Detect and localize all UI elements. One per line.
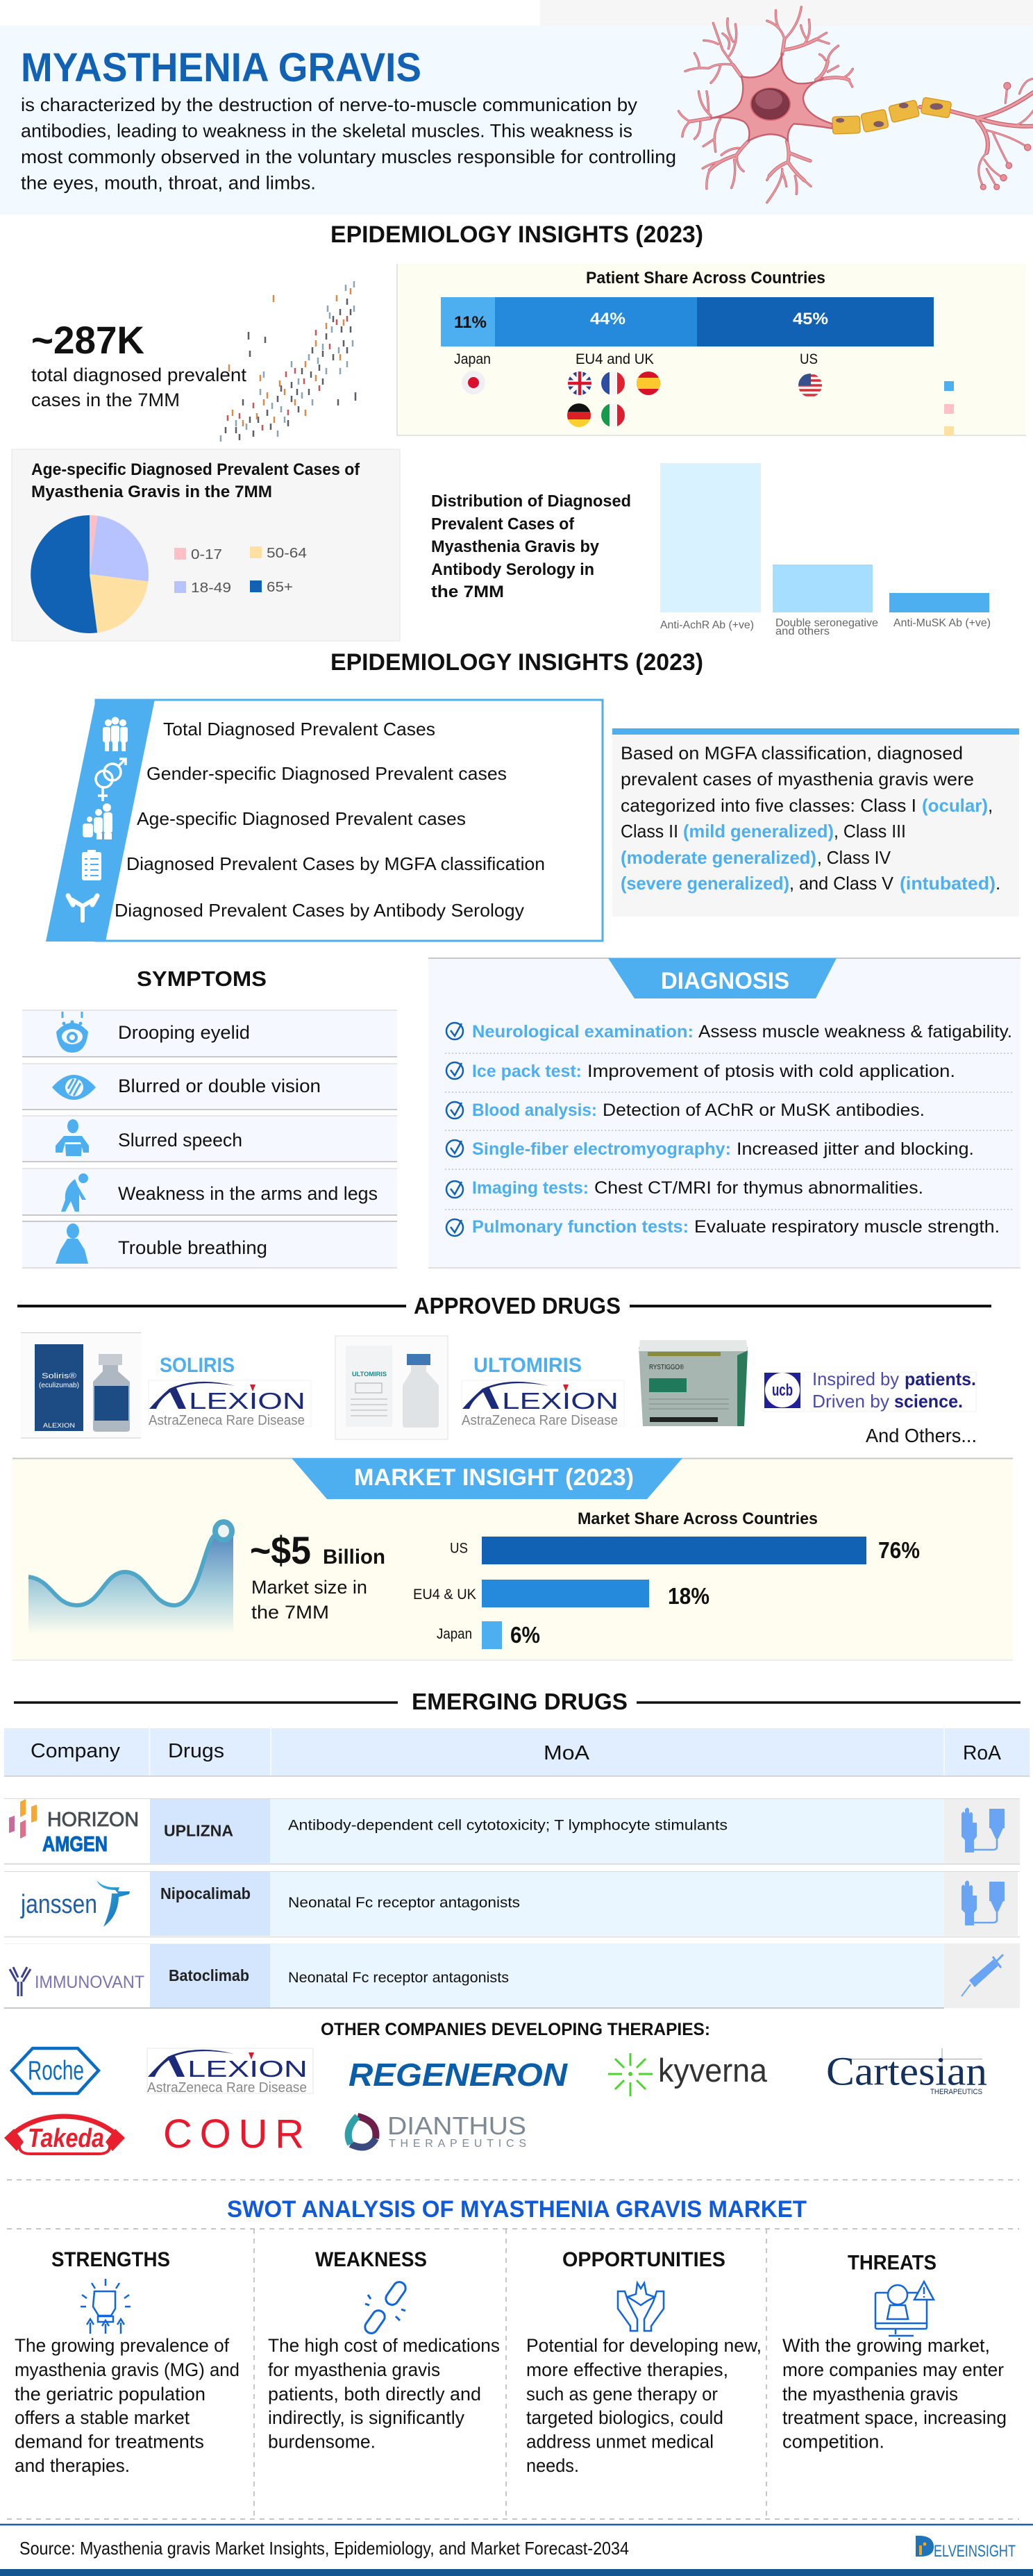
logo: Horizon and Amgen: HORIZON [47,1809,139,1831]
bar chart: market share: Market Share Across Countries [578,1509,818,1528]
country labels: US [800,351,818,367]
logo: Alexion [147,2048,313,2096]
bar chart: antibody serology: Anti-MuSK Ab (+ve) [893,617,991,629]
pie legend: 0-17 [191,547,222,562]
icon: flag of Spain [637,371,660,395]
heading: SWOT analysis: SWOT ANALYSIS OF MYASTHENIA GRAVIS MARKET [227,2196,807,2223]
logo: Dianthus: DIANTHUS [387,2111,526,2140]
check icons [446,1023,463,1236]
stacked bar chart: 11% [454,313,487,332]
icon: clipboard checklist [82,850,101,880]
panel: weakness: indirectly, is significantly [268,2407,464,2428]
symptom row: slurred speech: Slurred speech [118,1130,242,1151]
pie legend: 65+ [267,580,293,595]
table row: Uplizna: UPLIZNA [164,1822,233,1840]
stacked bar chart: 44% [590,310,625,328]
bar chart: market share: 18% [668,1583,709,1609]
logo: Roche [12,2048,99,2093]
drug image: Ultomiris pack [335,1336,448,1439]
table header: MoA [544,1742,590,1764]
symptom row: blurred vision [22,1063,397,1110]
diagnosis item 6: Pulmonary function tests: [472,1217,689,1237]
panel: MGFA classification note: Class II [621,821,678,842]
icon: weak person [61,1173,88,1212]
panel: MGFA classification note: (moderate generalized) [621,847,816,868]
drug name: Soliris: SOLIRIS [160,1354,235,1377]
icon: flag of Japan [462,371,485,394]
panel: weakness: WEAKNESS [315,2248,427,2271]
panel: strengths: The growing prevalence of [15,2335,229,2356]
section frame: SWOT dashed lines [7,2180,1019,2519]
stat: total prevalent cases: ~287K [31,318,144,362]
panel: strengths: the geriatric population [15,2384,205,2404]
logo: Cartesian: Cartesian [826,2048,987,2094]
panel: market insight [12,1458,1013,1660]
diagnosis item 6 [472,1217,1000,1237]
list item 3: Age-specific Diagnosed Prevalent cases [137,808,466,829]
table row: Nipocalimab: Neonatal Fc receptor antagonists [288,1895,520,1911]
stat: market size: Market size in [251,1577,367,1598]
panel: age-specific pie chart [12,449,400,641]
icon: intravenous route [961,1808,1005,1852]
text: and others: And Others... [866,1425,977,1446]
list item 5: Diagnosed Prevalent Cases by Antibody Serology [115,900,524,921]
panel: opportunities: needs. [526,2455,579,2476]
panel: MGFA classification note: Based on MGFA classification, diagnosed [621,743,963,764]
intro text block: most commonly observed in the voluntary muscles responsible for controlling [21,147,676,167]
panel: opportunities: address unmet medical [526,2432,714,2452]
source text: Source: Myasthenia gravis Market Insights, Epidemiology, and Market Forecast-2034 [19,2538,629,2559]
symptom row: weakness [22,1168,397,1215]
icon: raised fist [81,2279,131,2334]
stat: total prevalent cases: total diagnosed prevalent [31,365,246,385]
logo: Roche: Roche [28,2056,84,2086]
table row: Batoclimab: Neonatal Fc receptor antagonists [288,1970,509,1986]
banner: market insight: MARKET INSIGHT (2023) [354,1464,634,1491]
table header: RoA [963,1742,1002,1764]
diagnosis item 5 [472,1178,923,1198]
panel: MGFA classification note: prevalent cases of myasthenia gravis were [621,769,974,789]
intro text block [21,94,676,193]
pie legend: 18-49 [191,580,231,596]
diagnosis item 2 [472,1062,955,1081]
drug image: Ultomiris pack: ULTOMIRIS [352,1371,387,1378]
diagnosis item 1 [472,1022,1012,1042]
logo: UCB: Driven by [812,1391,889,1412]
stat: market size: ~$5 [250,1528,311,1572]
panel: threats: THREATS [848,2251,937,2275]
diagnosis item 2: Improvement of ptosis with cold application. [587,1062,955,1081]
logo: Cour: COUR [163,2111,304,2157]
panel: strengths: demand for treatments [15,2432,204,2452]
stat: market size: Billion [323,1546,385,1569]
diagnosis item 6: Evaluate respiratory muscle strength. [694,1217,1000,1237]
logo: UCB [764,1369,976,1412]
panel: weakness: burdensome. [268,2432,376,2452]
diagnosis item 1: Assess muscle weakness & fatigability. [698,1022,1012,1042]
logo: Alexion: AstraZeneca Rare Disease [147,2080,307,2096]
panel: opportunities: Potential for developing new, [526,2335,762,2356]
icon: neuron illustration [679,7,1033,203]
panel: threats: treatment space, increasing [782,2407,1007,2428]
drug image: Soliris pack [21,1332,141,1438]
area chart: market growth [28,1519,235,1634]
list item 4: Diagnosed Prevalent Cases by MGFA classification [126,853,545,874]
diagnosis item 1: Neurological examination: [472,1022,694,1042]
panel: MGFA classification note: , and Class V [789,873,894,894]
list item 2: Gender-specific Diagnosed Prevalent cases [146,763,507,784]
icon: family age groups [83,803,112,839]
bar chart: market share: 76% [878,1537,920,1563]
banner: diagnosis [608,958,837,998]
table row: Batoclimab: Batoclimab [169,1966,249,1984]
text block: antibody serology title [431,492,631,601]
logo: Alexion: LEXION [502,1388,619,1414]
logo: Takeda [4,2116,125,2154]
logo: Dianthus: THERAPEUTICS [389,2138,526,2150]
pie legend [174,546,307,596]
heading: epidemiology insights: EPIDEMIOLOGY INSIGHTS (2023) [330,221,703,248]
panel: MGFA classification note [612,728,1019,917]
drug image: Rystiggo pack: RYSTIGGO® [649,1364,685,1371]
text block: antibody serology title: Distribution of Diagnosed [431,492,631,511]
text block: antibody serology title: the 7MM [431,583,504,601]
panel: MGFA classification note: , Class IV [817,847,891,868]
icon: flag of France [601,371,625,395]
logo: Horizon and Amgen: AMGEN [42,1832,108,1856]
list item 1: Total Diagnosed Prevalent Cases [163,719,435,739]
footer [0,2525,1033,2576]
table row: Uplizna [4,1798,1020,1864]
country labels: Japan [454,351,491,367]
logo: Immunovant [10,1967,144,1996]
intro text block: the eyes, mouth, throat, and limbs. [21,172,316,193]
symptom row: trouble breathing: Trouble breathing [118,1237,267,1258]
panel: strengths: myasthenia gravis (MG) and [15,2359,240,2380]
stat: market size: the 7MM [251,1602,329,1623]
panel: MGFA classification note: (intubated) [900,873,996,894]
table row: Batoclimab [4,1944,1020,2008]
logo: UCB: ucb [772,1381,793,1400]
stat: total prevalent cases: cases in the 7MM [31,390,180,410]
bar chart: market share: 6% [510,1622,540,1648]
bar chart: market share: US [450,1540,468,1557]
bar chart: antibody serology [660,463,991,637]
panel: MGFA classification note: , Class III [834,821,906,842]
banner: market insight [292,1458,682,1499]
heading: epidemiology insights second: EPIDEMIOLOGY INSIGHTS (2023) [330,649,703,676]
icon: flag of US [798,374,822,397]
panel: threats: competition. [782,2432,884,2452]
panel title: Patient Share Across Countries [586,269,825,287]
heading: approved drugs: APPROVED DRUGS [414,1293,621,1319]
icon: syringe [961,1955,1003,1996]
panel: threats: With the growing market, [782,2335,990,2356]
diagnosis item 5: Chest CT/MRI for thymus abnormalities. [594,1178,923,1198]
diagnosis item 3 [472,1101,925,1120]
panel: threats: the myasthenia gravis [782,2384,958,2404]
panel: weakness: patients, both directly and [268,2384,481,2404]
panel: strengths: offers a stable market [15,2407,190,2428]
panel: strengths: STRENGTHS [51,2248,170,2271]
panel title [31,460,360,501]
icon: flag of Germany [567,403,591,427]
heading: other companies: OTHER COMPANIES DEVELOPING THERAPIES: [321,2020,710,2039]
header background [0,0,1033,215]
panel: symptoms list [22,1010,397,1268]
logo: Regeneron: REGENERON [348,2057,568,2093]
title: MYASTHENIA GRAVIS [21,45,421,90]
table row: Uplizna: Antibody-dependent cell cytotoxicity; T lymphocyte stimulants [288,1818,728,1833]
icon: drooping eye [56,1012,88,1053]
logo: UCB: science. [894,1391,963,1412]
logo: Alexion: LEXION [187,2056,308,2082]
stacked bar chart: 45% [793,310,828,328]
text block: antibody serology title: Antibody Serology in [431,560,594,579]
table row: Nipocalimab [4,1872,1020,1937]
logo: Alexion [149,1380,311,1428]
stacked bar chart [441,297,934,346]
heading: symptoms: SYMPTOMS [137,967,267,991]
intro text block: is characterized by the destruction of nerve-to-muscle communication by [21,94,638,115]
drug image: Soliris pack: (eculizumab) [39,1382,79,1389]
panel: MGFA classification note: . [996,873,1000,894]
diagnosis item 3: Blood analysis: [472,1101,597,1120]
logo: Cartesian: THERAPEUTICS [930,2088,982,2096]
panel: opportunities: more effective therapies, [526,2359,728,2380]
logo: Kyverna: kyverna [658,2052,768,2089]
panel: epidemiology segmentation list [46,699,603,942]
icon: flag of Italy [601,403,625,427]
symptom row: drooping eyelid [22,1010,397,1057]
panel: MGFA classification note: (mild generalized) [683,821,834,842]
pie chart [31,515,149,633]
drug name: Ultomiris: ULTOMIRIS [473,1354,582,1377]
bar chart: antibody serology: Double seronegative [775,617,878,629]
logo: Horizon and Amgen [9,1799,139,1856]
diagnosis item 2: Ice pack test: [472,1062,582,1081]
logo: UCB: Inspired by [812,1369,899,1389]
bar chart: market share: Japan [437,1626,472,1642]
symptom row: drooping eyelid: Drooping eyelid [118,1022,250,1043]
logo: Takeda: Takeda [28,2124,104,2153]
pie legend: 50-64 [267,546,307,561]
symptom row: weakness: Weakness in the arms and legs [118,1183,378,1204]
icon: gender symbols [96,759,126,801]
panel: weakness: The high cost of medications [268,2335,500,2356]
logo: Dianthus [348,2111,526,2150]
text block: antibody serology title: Myasthenia Gravis by [431,537,600,556]
icon: flag of UK [568,371,591,395]
icon: crowd of people [221,281,355,442]
logo: Janssen: janssen [20,1890,97,1919]
table header [4,1726,1030,1776]
panel: threats [782,2251,1007,2452]
icon: total cases people [103,717,128,751]
panel: MGFA classification note: categorized into five classes: Class I [621,795,916,816]
logo: Kyverna [608,2052,768,2096]
panel: opportunities: targeted biologics, could [526,2407,723,2428]
diagnosis item 5: Imaging tests: [472,1178,589,1198]
logo: Alexion: LEXION [189,1388,305,1414]
country labels: EU4 and UK [576,351,654,367]
diagnosis item 4 [472,1139,974,1159]
table header: Drugs [168,1740,224,1762]
stat: market size [250,1528,385,1623]
diagnosis item 4: Single-fiber electromyography: [472,1139,731,1159]
panel: threats: more companies may enter [782,2359,1004,2380]
diagnosis item 4: Increased jitter and blocking. [737,1139,974,1159]
panel: MGFA classification note: (severe generalized) [621,873,789,894]
bar chart: antibody serology: Anti-AchR Ab (+ve) [660,619,754,631]
logo: Alexion: AstraZeneca Rare Disease [462,1413,618,1428]
panel: diagnosis [428,957,1021,1268]
legend swatches [944,381,954,435]
drug image: Soliris pack: ALEXION [43,1422,75,1429]
icon: person with lungs [56,1223,88,1264]
icon: person on monitor with warning [875,2282,934,2336]
icon: broken chain [362,2280,408,2336]
panel title: Myasthenia Gravis in the 7MM [31,483,272,501]
diagnosis item 3: Detection of AChR or MuSK antibodies. [603,1101,925,1120]
panel: opportunities: such as gene therapy or [526,2384,718,2404]
logo: UCB: patients. [905,1369,976,1389]
panel: weakness: for myasthenia gravis [268,2359,440,2380]
table row: Nipocalimab: Nipocalimab [160,1884,251,1902]
logo: Alexion [462,1380,624,1428]
bar chart: market share: EU4 & UK [413,1587,476,1603]
drug image: Rystiggo pack [639,1340,748,1426]
panel: opportunities [526,2248,762,2476]
icon: speaker at podium [56,1119,89,1156]
intro text block: antibodies, leading to weakness in the skeletal muscles. This weakness is [21,121,632,142]
panel: strengths [15,2248,240,2476]
stat: total prevalent cases [31,318,246,410]
bar chart: market share [413,1509,920,1649]
heading: emerging drugs: EMERGING DRUGS [412,1689,628,1714]
panel: patient share across countries [397,264,1026,435]
logo: Alexion: AstraZeneca Rare Disease [149,1413,305,1428]
panel: strengths: and therapies. [15,2455,130,2476]
table header: Company [31,1740,121,1762]
country labels [454,351,818,367]
panel title: Age-specific Diagnosed Prevalent Cases of [31,460,360,479]
bar chart: antibody serology: and others [775,626,830,637]
logo: DelveInsight [916,2536,1016,2561]
panel: weakness [268,2248,500,2452]
table: emerging drugs [4,1726,1030,2008]
drug image: Soliris pack: Soliris® [42,1372,76,1380]
panel: opportunities: OPPORTUNITIES [562,2248,725,2271]
banner: diagnosis: DIAGNOSIS [661,968,789,994]
symptom row: trouble breathing [22,1221,397,1268]
icon: antibody [68,896,97,921]
symptom row: blurred vision: Blurred or double vision [118,1076,321,1096]
icon: intravenous route [961,1880,1005,1925]
panel: MGFA classification note: , [988,795,993,816]
symptom row: slurred speech [22,1115,397,1162]
icon: hands holding star [618,2283,664,2331]
text block: antibody serology title: Prevalent Cases of [431,515,575,533]
logo: Immunovant: IMMUNOVANT [35,1973,144,1992]
icon: blurred eye [52,1075,96,1100]
logo: Janssen [20,1880,130,1927]
panel: MGFA classification note: (ocular) [922,795,988,816]
